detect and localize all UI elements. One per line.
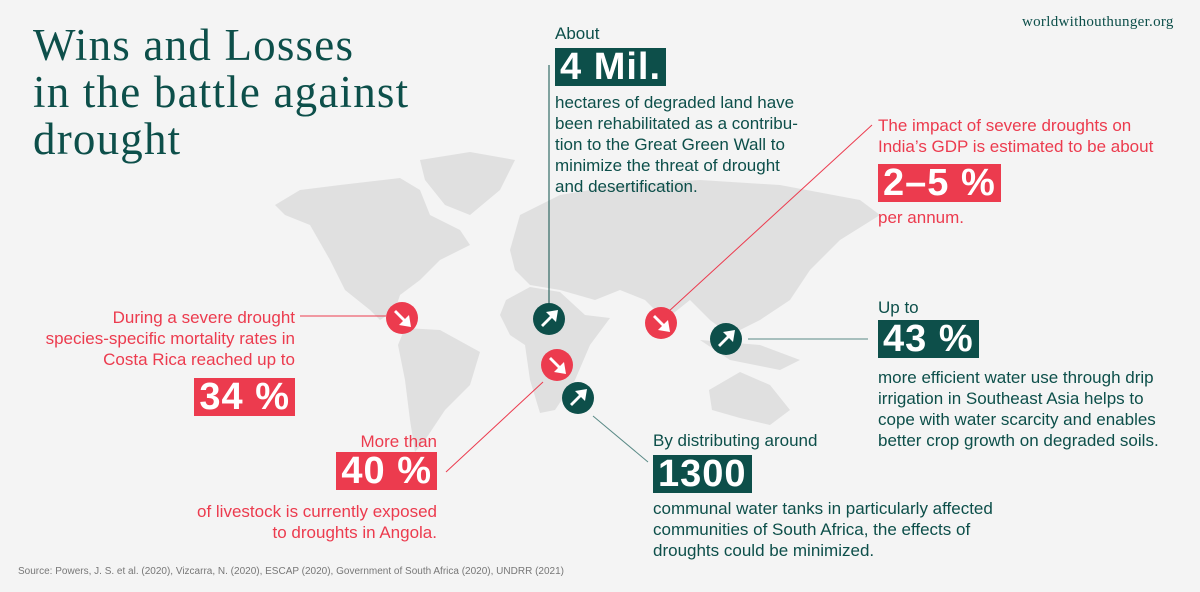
title: in the battle against — [33, 67, 409, 117]
callout: angola: More than — [360, 432, 437, 451]
callout: angola: of livestock is currently exposed — [197, 502, 437, 521]
callout: costa rica — [46, 308, 295, 418]
title — [33, 20, 409, 164]
callout: southeast asia: Up to — [878, 298, 919, 317]
callout: india: India’s GDP is estimated to be about — [878, 137, 1153, 156]
callout: southeast asia: better crop growth on degraded soils. — [878, 431, 1159, 450]
callout: south africa — [653, 431, 993, 560]
callout: costa rica: species-specific mortality rates in — [46, 329, 295, 348]
callout: south africa: communities of South Africa, the effects of — [653, 520, 970, 539]
title: Wins and Losses — [33, 20, 354, 70]
marker: costa rica — [386, 302, 418, 334]
callout: great green wall: hectares of degraded land have — [555, 93, 794, 112]
callout: south africa: droughts could be minimized. — [653, 541, 874, 560]
url: worldwithouthunger.org — [1022, 14, 1174, 30]
marker: south africa — [562, 382, 594, 414]
callout: great green wall — [555, 24, 798, 196]
callout: south africa: 1300 — [658, 453, 747, 495]
callout: southeast asia: cope with water scarcity and enables — [878, 410, 1156, 429]
callout: angola — [197, 432, 437, 542]
callout: southeast asia: irrigation in Southeast Asia helps to — [878, 389, 1144, 408]
callout: costa rica: 34 % — [199, 376, 290, 418]
callout: southeast asia: more efficient water use through drip — [878, 368, 1154, 387]
callout: costa rica: During a severe drought — [113, 308, 295, 327]
callout: costa rica: Costa Rica reached up to — [103, 350, 295, 369]
marker: india — [645, 307, 677, 339]
connector lines — [300, 65, 872, 472]
marker: angola — [541, 349, 573, 381]
callout: angola: to droughts in Angola. — [273, 523, 437, 542]
callout: great green wall: tion to the Great Green Wall to — [555, 135, 785, 154]
callout: great green wall: been rehabilitated as a contribu- — [555, 114, 798, 133]
callout: great green wall: minimize the threat of drought — [555, 156, 780, 175]
callout: great green wall: About — [555, 24, 599, 43]
callout: angola: 40 % — [341, 450, 432, 492]
callout: india: The impact of severe droughts on — [878, 116, 1131, 135]
callout: south africa: By distributing around — [653, 431, 817, 450]
callout: great green wall: 4 Mil. — [560, 46, 661, 88]
callout: southeast asia: 43 % — [883, 318, 974, 360]
callout: india: per annum. — [878, 208, 964, 227]
callout: south africa: communal water tanks in particularly affected — [653, 499, 993, 518]
source: Source: Powers, J. S. et al. (2020), Vizcarra, N. (2020), ESCAP (2020), Government of South Africa (2020), UNDRR (2021) — [18, 566, 564, 577]
callout: southeast asia — [878, 298, 1159, 450]
marker: southeast asia — [710, 323, 742, 355]
callout: india — [878, 116, 1154, 227]
callout: great green wall: and desertification. — [555, 177, 698, 196]
marker: great green wall — [533, 303, 565, 335]
title: drought — [33, 114, 181, 164]
callout: india: 2–5 % — [883, 162, 996, 204]
